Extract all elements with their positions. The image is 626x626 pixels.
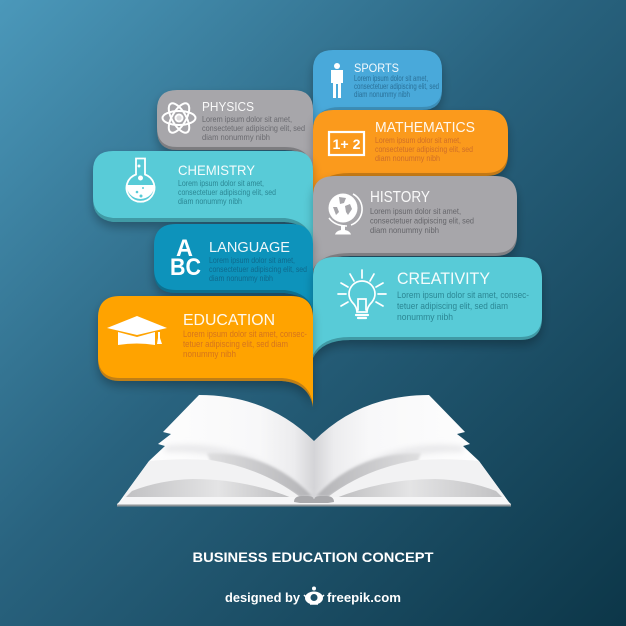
credit line [225, 586, 401, 605]
language text: LANGUAGE [209, 239, 290, 256]
education text: Lorem ipsum dolor sit amet, consec- [183, 329, 307, 339]
icon: abc letters: BC [170, 254, 201, 281]
spine [294, 496, 334, 503]
mathematics text [375, 119, 475, 163]
left page fold shading [164, 444, 245, 456]
mathematics text: diam nonummy nibh [375, 153, 440, 163]
sports text: Lorem ipsum dolor sit amet, [354, 73, 428, 83]
language text [209, 239, 307, 283]
creativity text: Lorem ipsum dolor sit amet, consec- [397, 290, 529, 301]
sports text: diam nonummy nibh [354, 89, 410, 99]
chemistry text: consectetuer adipiscing elit, sed [178, 187, 276, 197]
sports text: SPORTS [354, 61, 399, 75]
chemistry text: CHEMISTRY [178, 162, 256, 178]
icon: atom [162, 100, 196, 136]
chemistry text [178, 162, 276, 206]
right page fold shading [382, 444, 464, 456]
icon: chalkboard 1+2 [329, 132, 364, 155]
icon: globe [328, 194, 362, 234]
left lower band [126, 479, 292, 498]
mathematics text: Lorem ipsum dolor sit amet, [375, 135, 461, 145]
history text: Lorem ipsum dolor sit amet, [370, 206, 461, 216]
bubble: education [98, 296, 313, 407]
left page [118, 395, 314, 503]
right lower band [336, 479, 502, 498]
education text: EDUCATION [183, 312, 275, 329]
open book [110, 390, 518, 508]
history text: diam nonummy nibh [370, 225, 439, 235]
physics text: consectetuer adipiscing elit, sed [202, 123, 305, 133]
creativity text: tetuer adipiscing elit, sed diam [397, 301, 508, 312]
bubble: chemistry [93, 151, 313, 245]
icon: flask [126, 158, 154, 202]
bubble: language [154, 224, 313, 312]
language text: consectetuer adipiscing elit, sed [209, 264, 307, 274]
title: BUSINESS EDUCATION CONCEPT [192, 549, 434, 565]
bottom edge [117, 497, 511, 505]
language text: diam nonummy nibh [209, 273, 273, 283]
history text: consectetuer adipiscing elit, sed [370, 216, 474, 226]
physics text: diam nonummy nibh [202, 132, 270, 142]
bubble: sports [313, 50, 442, 128]
sports text: consectetuer adipiscing elit, sed [354, 81, 439, 91]
education text: tetuer adipiscing elit, sed diam [183, 339, 288, 349]
credit line: freepik.com [327, 590, 401, 605]
icon: abc letters [170, 235, 201, 281]
physics text [202, 99, 305, 142]
chemistry text: diam nonummy nibh [178, 196, 242, 206]
physics text: Lorem ipsum dolor sit amet, [202, 114, 292, 124]
physics text: PHYSICS [202, 99, 254, 114]
right page [314, 395, 510, 503]
icon: light bulb [338, 270, 386, 318]
icon: freepik logo [304, 586, 324, 604]
icon: abc letters: A [176, 235, 193, 262]
mathematics text: consectetuer adipiscing elit, sed [375, 144, 473, 154]
bubble: physics [157, 90, 313, 172]
history text: HISTORY [370, 189, 430, 206]
creativity text: nonummy nibh [397, 312, 453, 323]
history text [370, 189, 474, 235]
sports text [354, 61, 439, 99]
bubble: history [313, 176, 517, 272]
chemistry text: Lorem ipsum dolor sit amet, [178, 178, 264, 188]
education text: nonummy nibh [183, 349, 236, 359]
mathematics text: MATHEMATICS [375, 119, 475, 136]
creativity text [397, 269, 529, 323]
bubble: mathematics [313, 110, 508, 194]
language text: Lorem ipsum dolor sit amet, [209, 255, 295, 265]
icon: graduation cap [107, 316, 167, 345]
credit line: designed by [225, 590, 301, 605]
education text [183, 312, 307, 359]
creativity text: CREATIVITY [397, 269, 490, 288]
bubble: creativity [313, 257, 542, 358]
icon: person [331, 63, 343, 98]
icon: chalkboard 1+2: 1+ 2 [332, 136, 361, 152]
